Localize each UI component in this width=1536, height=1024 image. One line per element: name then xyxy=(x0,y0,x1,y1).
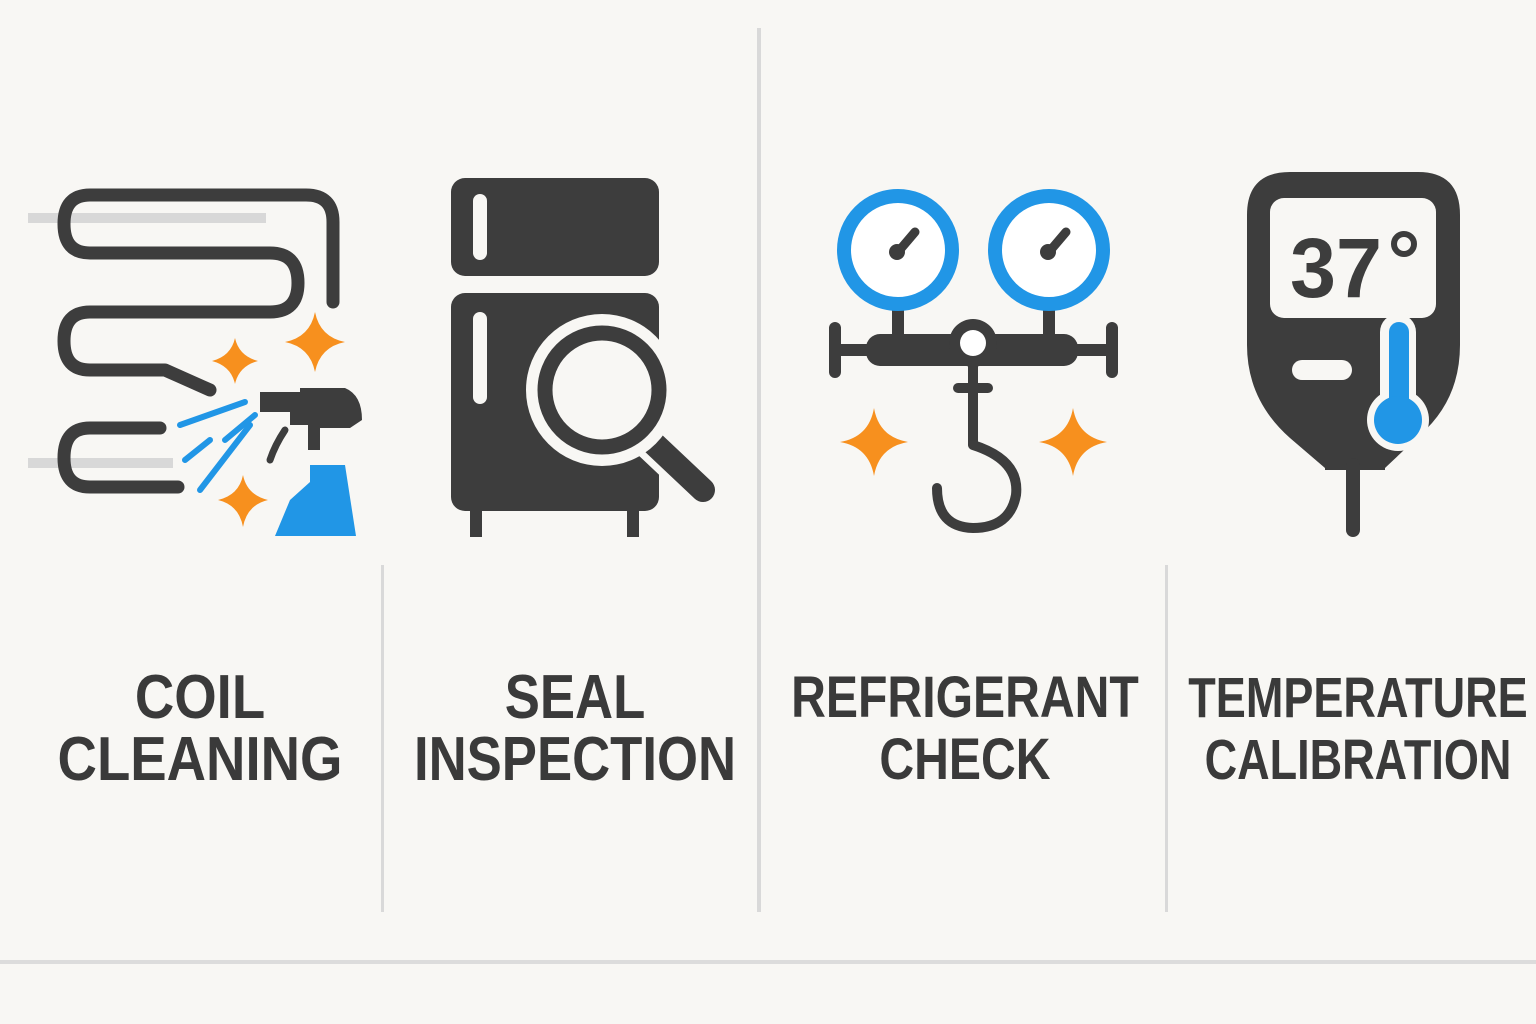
icon: fridge with magnifier xyxy=(451,178,703,537)
label: seal inspection: INSPECTION xyxy=(414,725,736,794)
label: refrigerant check: CHECK xyxy=(879,727,1051,792)
label: seal inspection xyxy=(414,663,736,794)
label: seal inspection: SEAL xyxy=(505,663,645,732)
label: temperature calibration xyxy=(1188,666,1528,792)
icon: refrigerant gauges xyxy=(835,196,1112,528)
label: temperature calibration: TEMPERATURE xyxy=(1188,666,1528,730)
label: coil cleaning: COIL xyxy=(135,663,265,732)
label: coil cleaning xyxy=(58,663,342,794)
label: refrigerant check: REFRIGERANT xyxy=(791,665,1139,730)
icon: thermometer device: 37 xyxy=(1290,221,1382,315)
label: temperature calibration: CALIBRATION xyxy=(1205,728,1511,792)
label: refrigerant check xyxy=(791,665,1139,792)
label: coil cleaning: CLEANING xyxy=(58,725,342,794)
icon: thermometer device xyxy=(1247,172,1460,530)
icon: coil cleaning xyxy=(28,195,362,536)
